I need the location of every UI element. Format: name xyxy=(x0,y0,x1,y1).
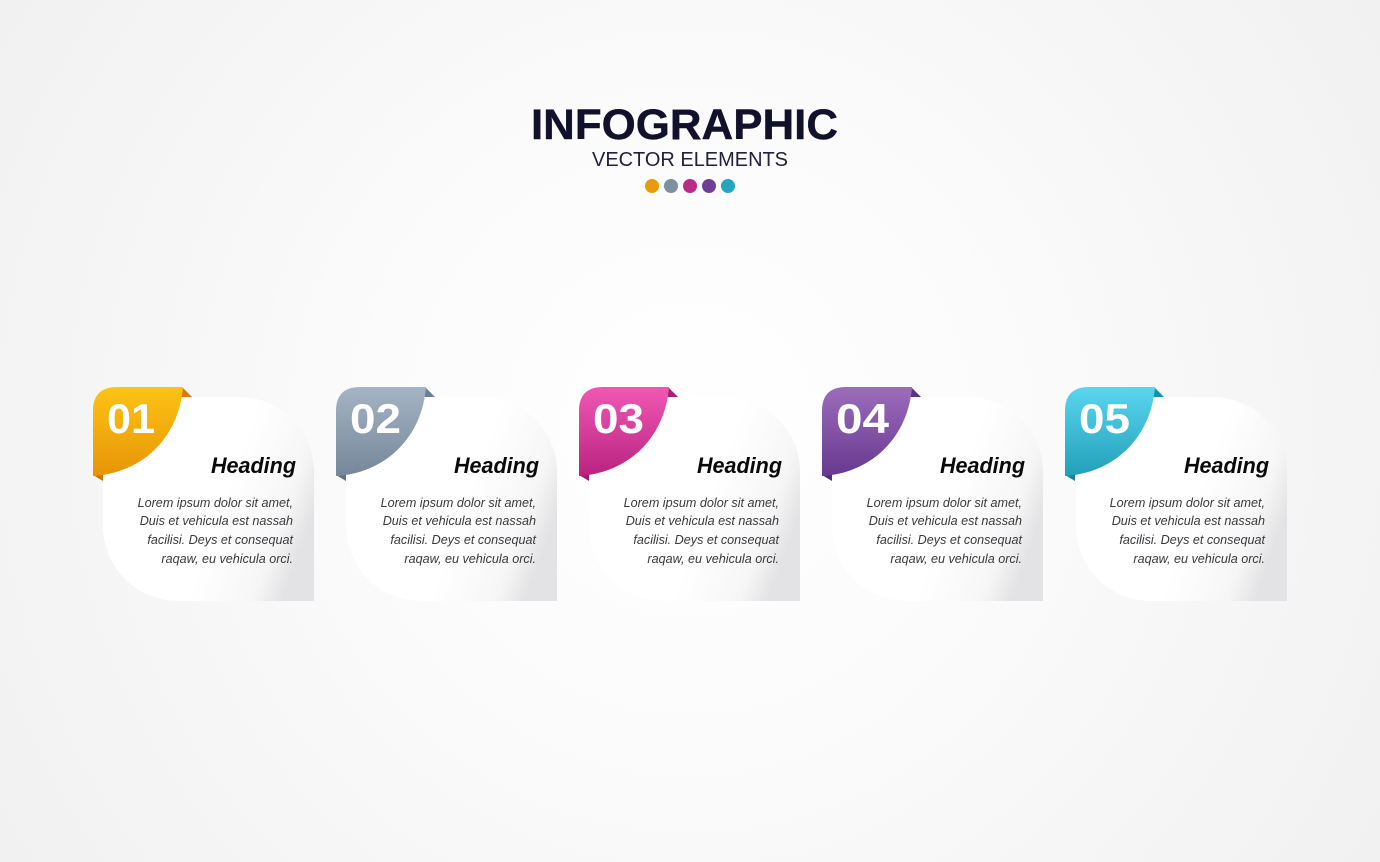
number: 03 xyxy=(593,395,644,442)
body text: raqaw, eu vehicula orci. xyxy=(161,552,293,566)
heading: Heading xyxy=(1184,453,1270,478)
body text xyxy=(1110,496,1265,566)
card xyxy=(103,397,314,601)
colour dots xyxy=(645,179,735,193)
body text: Duis et vehicula est nassah xyxy=(1112,514,1265,528)
panel: step 02 xyxy=(336,387,557,601)
number: 04 xyxy=(836,395,890,442)
body text: raqaw, eu vehicula orci. xyxy=(1133,552,1265,566)
body text: facilisi. Deys et consequat xyxy=(390,533,536,547)
body text xyxy=(867,496,1022,566)
body text: facilisi. Deys et consequat xyxy=(1119,533,1265,547)
ribbon badge xyxy=(822,387,921,481)
card xyxy=(346,397,557,601)
body text: Lorem ipsum dolor sit amet, xyxy=(381,496,536,510)
number: 05 xyxy=(1079,395,1130,442)
body text xyxy=(138,496,293,566)
heading: Heading xyxy=(211,453,297,478)
body text: raqaw, eu vehicula orci. xyxy=(404,552,536,566)
panel: step 01 xyxy=(93,387,314,601)
number: 02 xyxy=(350,395,401,442)
body text: Duis et vehicula est nassah xyxy=(140,514,293,528)
body text: Duis et vehicula est nassah xyxy=(869,514,1022,528)
heading: Heading xyxy=(454,453,540,478)
number: 01 xyxy=(107,395,155,442)
body text: Lorem ipsum dolor sit amet, xyxy=(1110,496,1265,510)
title: INFOGRAPHIC xyxy=(531,101,838,149)
card xyxy=(1076,397,1287,601)
card xyxy=(589,397,800,601)
body text: facilisi. Deys et consequat xyxy=(147,533,293,547)
panel: step 03 xyxy=(579,387,800,601)
body text: raqaw, eu vehicula orci. xyxy=(647,552,779,566)
ribbon badge xyxy=(93,387,192,481)
title block xyxy=(531,101,838,193)
panel: step 05 xyxy=(1065,387,1287,601)
ribbon badge xyxy=(336,387,435,481)
body text: Lorem ipsum dolor sit amet, xyxy=(138,496,293,510)
body text xyxy=(624,496,779,566)
panel: step 04 xyxy=(822,387,1043,601)
body text: Lorem ipsum dolor sit amet, xyxy=(624,496,779,510)
body text: Duis et vehicula est nassah xyxy=(383,514,536,528)
body text: Lorem ipsum dolor sit amet, xyxy=(867,496,1022,510)
heading: Heading xyxy=(697,453,783,478)
ribbon badge xyxy=(1065,387,1164,481)
body text: facilisi. Deys et consequat xyxy=(876,533,1022,547)
subtitle: VECTOR ELEMENTS xyxy=(592,149,788,171)
heading: Heading xyxy=(940,453,1026,478)
body text: raqaw, eu vehicula orci. xyxy=(890,552,1022,566)
body text: facilisi. Deys et consequat xyxy=(633,533,779,547)
card xyxy=(832,397,1043,601)
body text: Duis et vehicula est nassah xyxy=(626,514,779,528)
ribbon badge xyxy=(579,387,678,481)
body text xyxy=(381,496,536,566)
